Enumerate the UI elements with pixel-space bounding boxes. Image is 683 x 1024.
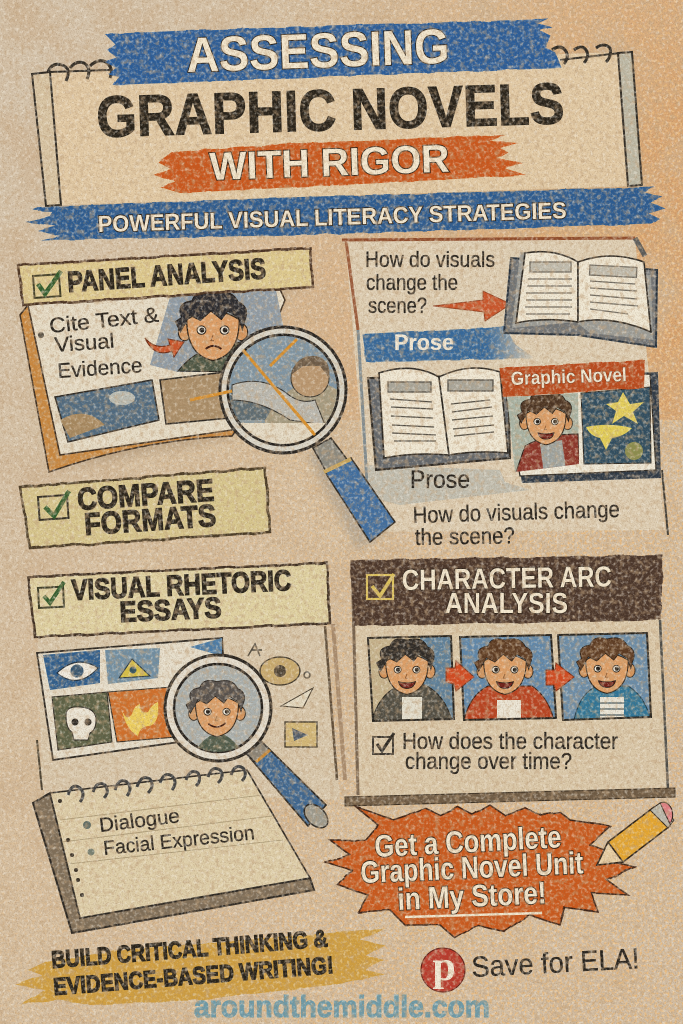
checkbox (33, 271, 61, 298)
notebook holes (58, 799, 84, 897)
checkbox (367, 574, 394, 599)
comic book page (500, 360, 661, 483)
comic panel: action scene (581, 387, 651, 464)
title banner: With Rigor (154, 135, 526, 193)
website url: aroundthemiddle.com (194, 989, 490, 1024)
panel text: cite evidence: Cite Text & (48, 304, 160, 338)
prose label bar: Prose (394, 330, 454, 355)
label: graphic novel (500, 360, 645, 397)
question text: top: How do visuals (365, 247, 495, 272)
label: graphic novel: Graphic Novel (510, 365, 627, 390)
title text: Assessing: ASSESSING (185, 20, 450, 83)
icon: notebook (33, 767, 314, 933)
title text: With Rigor: WITH RIGOR (209, 138, 450, 189)
panel: visual rhetoric essays (37, 624, 345, 800)
callout text: Graphic Novel Unit (360, 845, 584, 890)
notebook spiral (68, 767, 245, 802)
icon: pencil (597, 802, 674, 865)
portrait: boy in gray hoodie (368, 636, 454, 723)
icon: open book top (504, 252, 657, 347)
banner text: BUILD CRITICAL THINKING & (50, 925, 329, 974)
title text: Graphic Novels: GRAPHIC NOVELS (95, 71, 565, 150)
panel: panel analysis comic page (20, 285, 290, 472)
art card (37, 638, 228, 760)
callout text: in My Store! (397, 875, 547, 917)
comic panel: smiling boy (507, 393, 579, 472)
panel: character arc analysis (345, 555, 675, 806)
notebook text (83, 805, 256, 860)
icon: magnifying glass over portrait (165, 655, 332, 832)
icon: pinterest (421, 944, 465, 992)
panel text: cite evidence: Visual (54, 330, 115, 357)
doodles: rhetoric symbols (248, 644, 317, 747)
heading: visual rhetoric essays: ESSAYS (119, 592, 222, 629)
arrow: first change (446, 661, 474, 691)
heading: compare formats: COMPARE (76, 473, 215, 517)
heading: panel analysis: PANEL ANALYSIS (66, 253, 267, 299)
icon: eye cell (43, 650, 100, 690)
icon: skull cell (52, 692, 112, 750)
question text: top: change the (366, 270, 458, 295)
heading: compare formats: FORMATS (83, 498, 217, 542)
callout: starburst (325, 805, 635, 938)
save for ELA text: Save for ELA! (471, 943, 640, 984)
comic panel: landscape (55, 380, 159, 442)
portrait: boy in red hoodie (458, 633, 558, 722)
character header bar: ANALYSIS (445, 588, 568, 620)
heading: visual rhetoric essays: VISUAL RHETORIC (71, 565, 292, 607)
question text: bottom (412, 496, 620, 550)
subtitle text: POWERFUL VISUAL LITERACY STRATEGIES (97, 197, 567, 237)
question text: character change (402, 728, 618, 774)
question text: character change: change over time? (405, 748, 572, 774)
panel text: cite evidence (38, 304, 160, 383)
portrait: boy in blue hoodie (556, 632, 652, 722)
question text: top (365, 247, 495, 318)
panel: compare formats right (342, 238, 668, 550)
notebook text: Dialogue (98, 805, 181, 837)
banner text (50, 925, 335, 1001)
callout text (360, 819, 584, 917)
banner: build critical thinking (15, 925, 385, 1005)
icon: pinterest: p (432, 944, 456, 990)
prose label bar (362, 327, 535, 362)
illustration: worried boy portrait (150, 290, 284, 372)
checkbox (38, 582, 64, 608)
question text: bottom: the scene? (415, 522, 515, 550)
icon: triangle cell (105, 648, 160, 684)
arrow: to portrait (145, 338, 184, 357)
character header bar (350, 555, 663, 626)
icon: magnifying glass over panel (190, 327, 395, 550)
checkbox (38, 491, 69, 520)
comic panel: wood tones (160, 372, 230, 424)
title banner: Assessing (105, 19, 562, 85)
character header bar: CHARACTER ARC (402, 561, 612, 597)
arrow: to book (433, 291, 511, 321)
panel text: cite evidence: Evidence (57, 354, 143, 383)
panel bottom bar (345, 788, 675, 806)
notebook text: Facial Expression (102, 822, 256, 860)
heading: compare formats (20, 468, 270, 548)
label: prose dark: Prose (410, 466, 470, 494)
arrow: second change (546, 663, 574, 691)
banner text: EVIDENCE-BASED WRITING! (52, 952, 335, 1001)
icon: fire cell (108, 687, 176, 742)
shaded area under books (366, 465, 530, 505)
question text: character change: How does the character (402, 728, 618, 754)
checkbox: question (373, 733, 394, 754)
callout text: Get a Complete (374, 819, 562, 864)
heading: visual rhetoric essays (28, 563, 330, 637)
icon: open book lower (368, 368, 510, 470)
question text: top: scene? (368, 293, 427, 318)
title panel: spiral notepad (32, 45, 642, 208)
subtitle banner (25, 187, 665, 240)
question text: bottom: How do visuals change (412, 496, 620, 528)
